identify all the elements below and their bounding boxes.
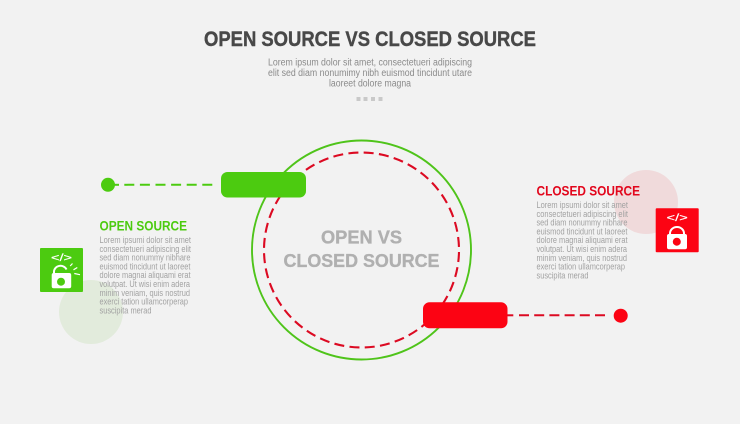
subtitle text: elit sed diam nonumimy nibh euismod tincidunt utare: [268, 68, 472, 79]
connector: closed source: [507, 309, 628, 323]
heading: open source: OPEN SOURCE: [100, 218, 187, 233]
body: closed source: exerci tation ullamcorperap: [536, 262, 625, 272]
body: open source: volutpat. Ut wisi enim adera: [100, 279, 190, 289]
panel: closed source: [536, 184, 640, 280]
body: closed source: consectetueri adipiscing elit: [536, 209, 628, 219]
icon: closed padlock with code: [656, 208, 699, 252]
decorative circle: green: [59, 280, 123, 344]
title: OPEN SOURCE VS CLOSED SOURCE: [204, 27, 536, 51]
central label: OPEN VS: [321, 227, 402, 248]
body: open source: minim veniam, quis nostrud: [100, 288, 190, 298]
heading: closed source: CLOSED SOURCE: [536, 184, 640, 198]
body: open source: Lorem ipsumi dolor sit amet: [100, 235, 191, 245]
body: open source: exerci tation ullamcorperap: [100, 297, 188, 307]
central label: CLOSED SOURCE: [284, 250, 440, 271]
body: open source: sed diam nonummy nibhare: [100, 253, 191, 263]
body: open source: consectetueri adipiscing elit: [100, 244, 191, 254]
body: closed source: [536, 200, 628, 280]
central circle: red dashed ring: [264, 152, 459, 348]
body: closed source: volutpat. Ut wisi enim adera: [536, 244, 627, 254]
subtitle text: laoreet dolore magna: [329, 78, 411, 90]
icon: open padlock with code: [40, 248, 83, 292]
green pill: [221, 172, 306, 198]
connector: open source: [101, 178, 213, 192]
central circle: green outer ring: [252, 140, 471, 360]
body: open source: suscipita merad: [100, 305, 152, 315]
body: closed source: suscipita merad: [536, 270, 589, 280]
decorative circle: red: [614, 170, 678, 234]
body: open source: [100, 235, 191, 315]
subtitle text: Lorem ipsum dolor sit amet, consectetueri adipiscing: [268, 58, 472, 68]
body: closed source: euismod tincidunt ut laoreet: [536, 226, 628, 236]
body: closed source: sed diam nonummy nibhare: [536, 218, 628, 228]
icon: open padlock with code: </>: [51, 252, 72, 264]
subtitle text: [268, 58, 472, 90]
body: closed source: Lorem ipsumi dolor sit amet: [536, 200, 628, 210]
header dots: [356, 97, 382, 101]
body: closed source: minim veniam, quis nostrud: [536, 253, 627, 263]
panel: open source: [100, 218, 191, 315]
body: closed source: dolore magnai aliquami erat: [536, 235, 628, 245]
icon: closed padlock with code: </>: [667, 212, 688, 224]
central label: [284, 227, 440, 271]
body: open source: euismod tincidunt ut laoreet: [100, 261, 191, 271]
body: open source: dolore magnai aliquami erat: [100, 270, 191, 280]
red pill: [423, 302, 508, 328]
